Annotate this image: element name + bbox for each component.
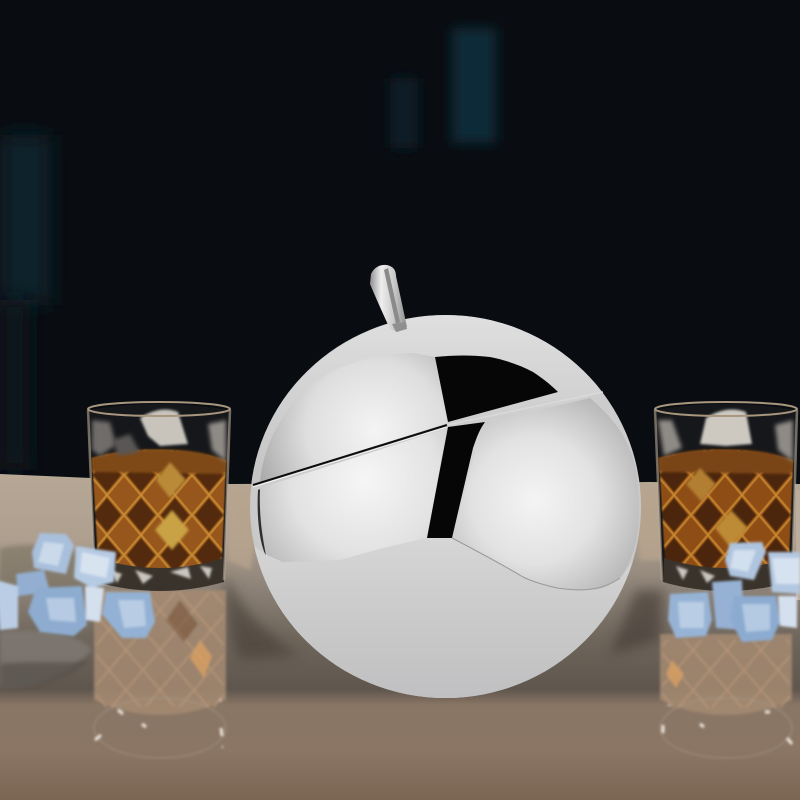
lower body reflection (254, 546, 632, 698)
left whisky glass (88, 402, 230, 591)
rim and sides (655, 402, 797, 416)
ice in left glass (140, 410, 188, 446)
lower black wedge (427, 422, 485, 538)
marble table (0, 474, 800, 800)
upper glass streaks (92, 420, 116, 456)
crystal base (96, 558, 224, 591)
lid bright panel (260, 353, 448, 482)
ice cubes right (668, 542, 800, 642)
right panel (452, 398, 639, 590)
stainless steel sphere (245, 315, 650, 710)
ice in right glass (700, 410, 752, 446)
lid band (245, 315, 606, 490)
marble veining (0, 545, 110, 600)
whisky with cut-glass lattice (92, 449, 226, 569)
lid handle (370, 265, 407, 332)
rim and sides (88, 402, 230, 416)
left glass reflection (94, 590, 226, 758)
lower left panel (259, 428, 447, 562)
upper black wedge (435, 356, 558, 422)
left dark sliver (258, 489, 266, 555)
panel edge line (452, 538, 620, 590)
lid seam (253, 425, 447, 485)
crystal base (663, 558, 791, 591)
right whisky glass (655, 402, 797, 591)
upper glass streaks (658, 420, 682, 456)
whisky with cut-glass lattice (659, 449, 793, 569)
ice cubes left (0, 533, 155, 638)
right glass reflection (660, 634, 792, 758)
